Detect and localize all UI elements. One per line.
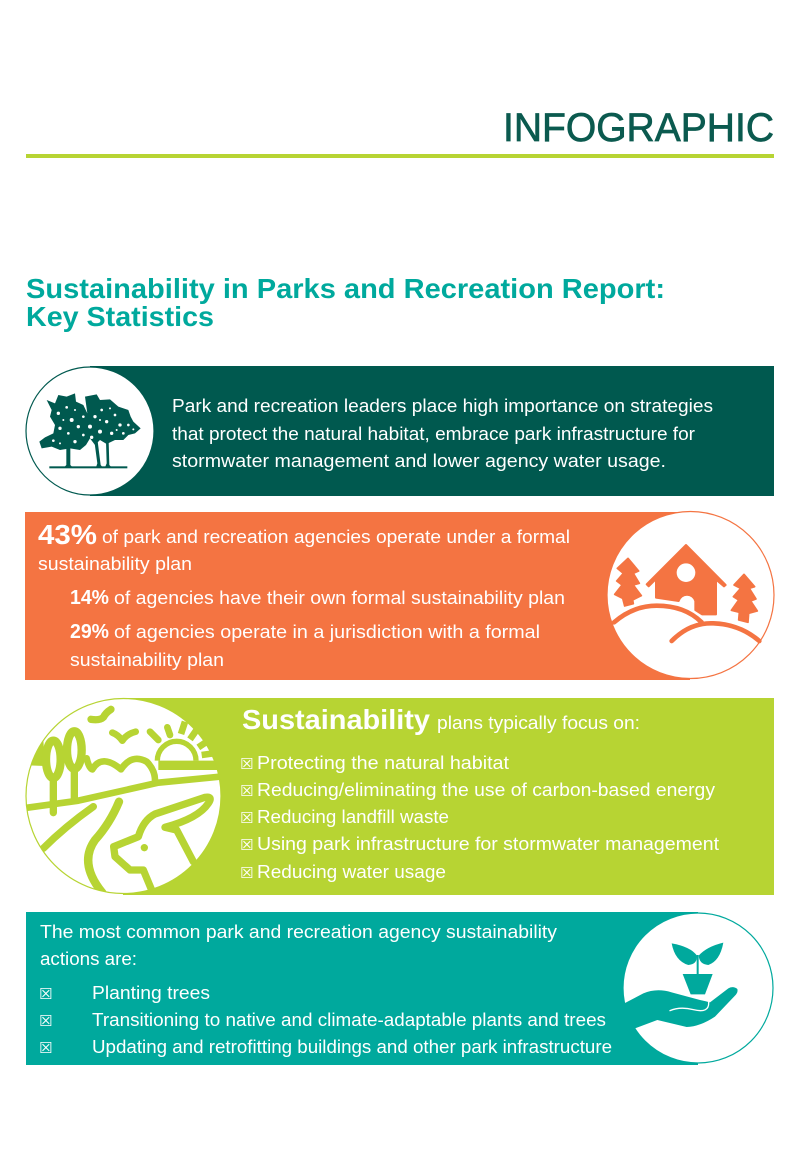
list: focus areas: ☒: [240, 782, 253, 800]
panel: formal sustainability plans: [25, 512, 774, 680]
text: actions intro: actions are:: [40, 949, 137, 969]
text: leaders statement: stormwater management and lower agency water usage.: [172, 451, 666, 471]
text: focus heading: plans typically focus on:: [437, 713, 640, 733]
list: actions: Updating and retrofitting buildings and other park infrastructure: [92, 1037, 612, 1057]
list: focus areas: Reducing/eliminating the use of carbon-based energy: [257, 780, 715, 800]
list: focus areas: ☒: [240, 755, 253, 773]
icon: landscape with deer: [25, 698, 223, 894]
list: focus areas: Reducing landfill waste: [257, 807, 449, 827]
text: 29% statistic: of agencies operate in a jurisdiction with a formal: [114, 622, 540, 642]
text: actions intro: The most common park and recreation agency sustainability: [40, 922, 557, 942]
header: INFOGRAPHIC: INFOGRAPHIC: [503, 106, 774, 150]
list: focus areas: Protecting the natural habitat: [257, 753, 509, 773]
text: 14% statistic: 14%: [70, 587, 109, 609]
title: Sustainability in Parks and Recreation Report:: [26, 273, 665, 304]
list: actions: Planting trees: [92, 983, 210, 1003]
text: 14% statistic: of agencies have their own formal sustainability plan: [114, 588, 565, 608]
title: Key Statistics: [26, 301, 214, 332]
list: focus areas: [240, 753, 719, 882]
list: focus areas: ☒: [240, 864, 253, 882]
text: actions intro: [40, 922, 557, 969]
text: 43% statistic: 43%: [38, 519, 97, 550]
list: focus areas: Using park infrastructure for stormwater management: [257, 834, 719, 854]
list: actions: ☒: [39, 1012, 52, 1030]
list: focus areas: ☒: [240, 809, 253, 827]
text: 43% statistic: of park and recreation agencies operate under a formal: [102, 527, 570, 547]
panel: plan focus areas: [25, 698, 774, 895]
text: 43% statistic: sustainability plan: [38, 554, 192, 574]
panel: common sustainability actions: [26, 912, 773, 1065]
list: actions: [39, 983, 612, 1057]
icon: hand holding plant: [620, 913, 773, 1063]
text: 43% statistic: [38, 519, 570, 574]
panel: natural habitat importance: [26, 366, 774, 496]
text: focus heading: [242, 704, 640, 735]
text: 29% statistic: sustainability plan: [70, 650, 224, 670]
list: actions: ☒: [39, 985, 52, 1003]
text: leaders statement: [172, 396, 713, 471]
list: actions: ☒: [39, 1039, 52, 1057]
icon: trees: [26, 367, 154, 495]
list: focus areas: ☒: [240, 836, 253, 854]
header: INFOGRAPHIC: [26, 106, 774, 158]
list: actions: Transitioning to native and climate-adaptable plants and trees: [92, 1010, 606, 1030]
list: focus areas: Reducing water usage: [257, 862, 446, 882]
text: 29% statistic: 29%: [70, 621, 109, 643]
title: [26, 273, 665, 332]
text: 29% statistic: [70, 621, 540, 670]
text: leaders statement: that protect the natural habitat, embrace park infrastructure for: [172, 424, 695, 444]
icon: house, trees and hills: [607, 512, 774, 678]
text: leaders statement: Park and recreation leaders place high importance on strategies: [172, 396, 713, 416]
text: focus heading: Sustainability: [242, 704, 430, 735]
